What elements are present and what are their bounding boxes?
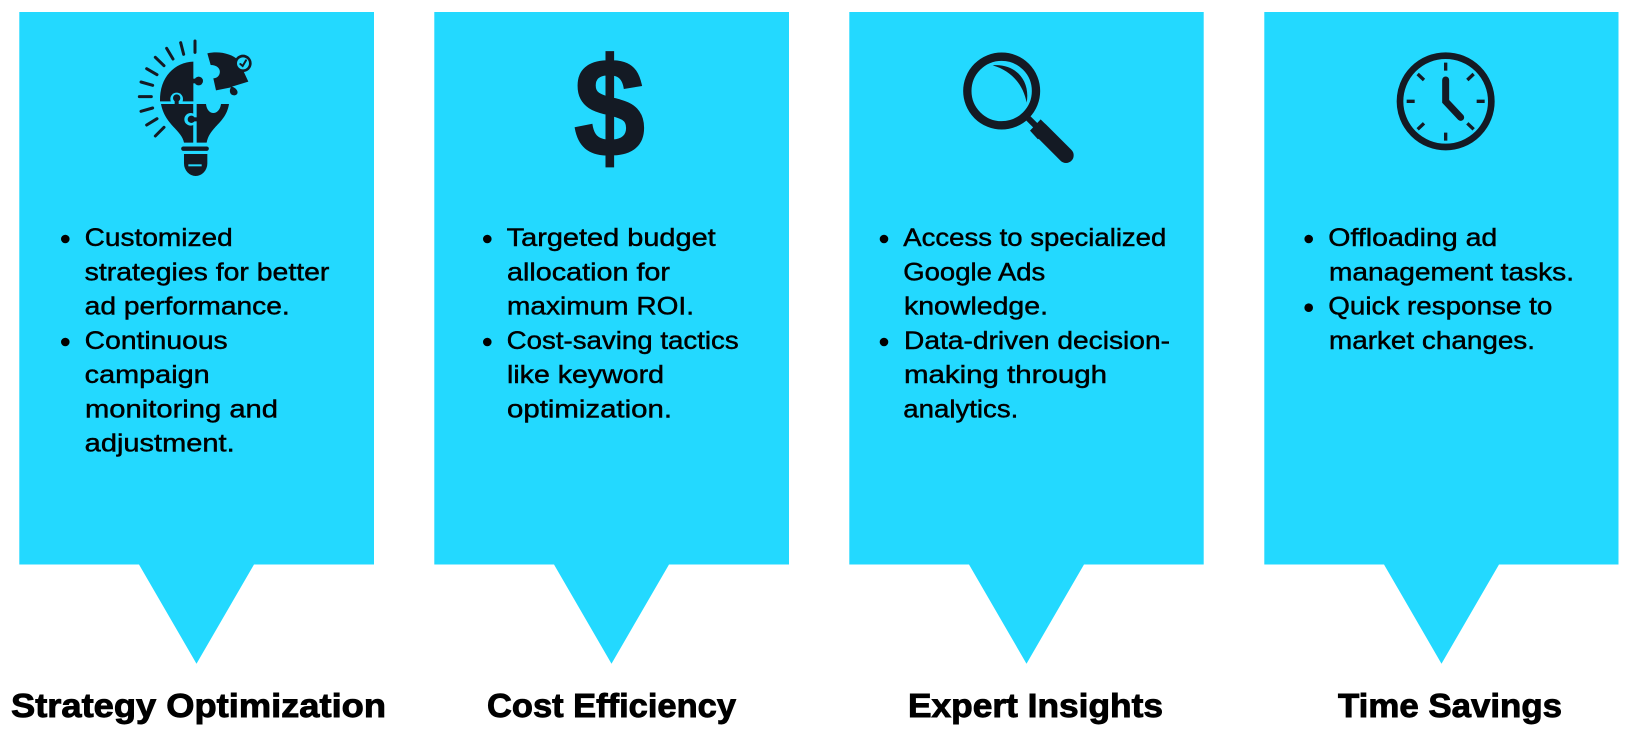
bullet list: ad performance. xyxy=(85,292,290,320)
heading: Expert Insights xyxy=(908,688,1163,725)
bullet list: Quick response to xyxy=(1328,292,1552,320)
panel: strategy optimization xyxy=(11,12,386,725)
bullet list: management tasks. xyxy=(1329,258,1574,286)
bullet list: Google Ads xyxy=(903,258,1045,286)
bullet list: Offloading ad xyxy=(1328,224,1497,252)
callout shape xyxy=(434,12,789,664)
bullet list xyxy=(1304,224,1574,355)
bullet list: Cost-saving tactics xyxy=(507,327,739,355)
bullet list: making through xyxy=(904,361,1107,389)
bullet list xyxy=(61,224,329,458)
bullet list: analytics. xyxy=(903,396,1018,424)
icon: magnifying glass xyxy=(967,57,1066,155)
bullet list: market changes. xyxy=(1329,327,1535,355)
bullet list: Data-driven decision- xyxy=(904,327,1170,355)
bullet list: Customized xyxy=(85,224,233,252)
heading: Cost Efficiency xyxy=(487,688,736,725)
bullet list: Continuous xyxy=(85,327,228,355)
bullet list: knowledge. xyxy=(904,292,1048,320)
heading: Strategy Optimization xyxy=(11,688,386,725)
bullet list: campaign xyxy=(85,361,210,389)
bullet list: strategies for better xyxy=(85,258,329,286)
bullet list: allocation for xyxy=(507,258,670,286)
bullet list: maximum ROI. xyxy=(507,292,694,320)
bullet list xyxy=(880,224,1170,424)
bullet list: adjustment. xyxy=(85,430,235,458)
panel: cost efficiency xyxy=(434,12,789,725)
bullet list: Targeted budget xyxy=(507,224,716,252)
callout shape xyxy=(849,12,1204,664)
callout shape xyxy=(1264,12,1618,664)
bullet list: optimization. xyxy=(507,396,672,424)
icon: dollar sign: $ xyxy=(574,29,645,186)
bullet list: Access to specialized xyxy=(903,224,1166,252)
panel: time savings xyxy=(1264,12,1618,725)
panel: expert insights xyxy=(849,12,1204,725)
icon: light bulb puzzle xyxy=(139,41,252,176)
bullet list xyxy=(483,224,739,424)
bullet list: monitoring and xyxy=(85,396,278,424)
heading: Time Savings xyxy=(1338,688,1562,725)
bullet list: like keyword xyxy=(507,361,664,389)
callout shape xyxy=(19,12,374,664)
icon: clock xyxy=(1400,56,1491,147)
